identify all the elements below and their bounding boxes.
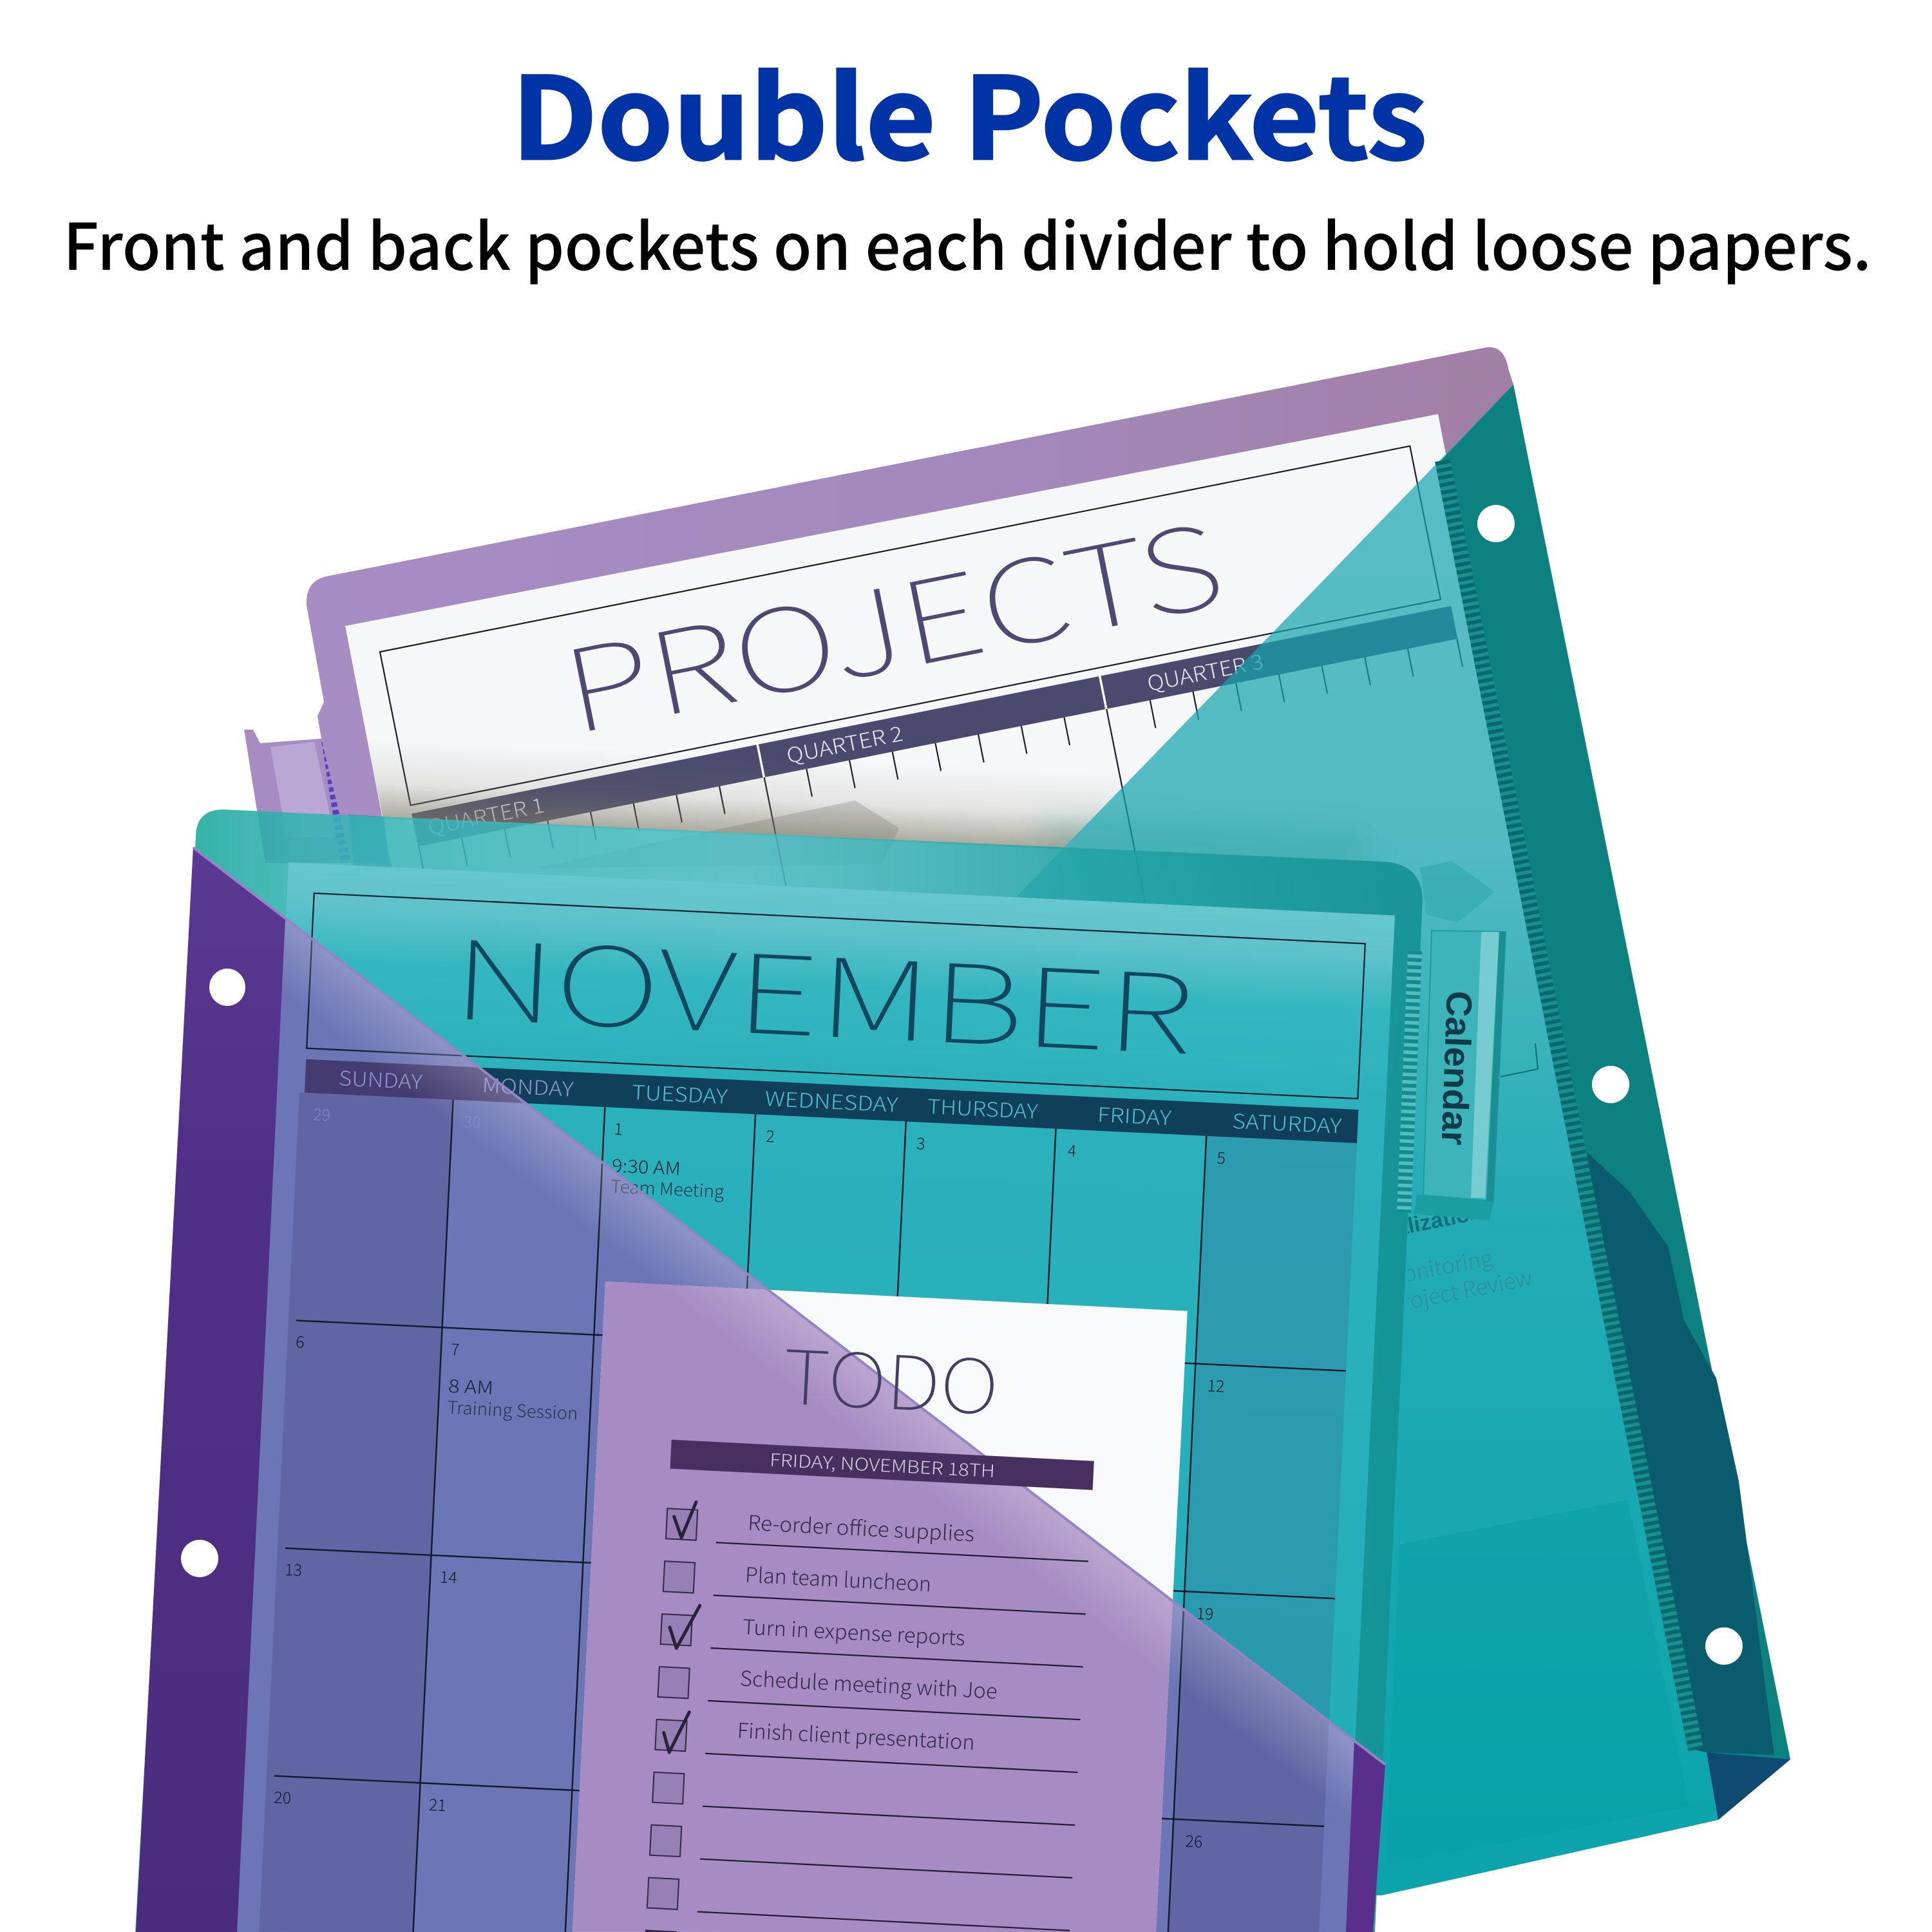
quarter timeline bar: QUARTER 2 bbox=[784, 717, 905, 770]
november sheet: weekday header bar bbox=[305, 1059, 1358, 1143]
shadow cast by front divider bbox=[371, 754, 1121, 849]
november sheet: paper bbox=[237, 862, 1395, 1932]
quarter timeline bar bbox=[411, 603, 1458, 848]
checklist boxes bbox=[646, 1508, 697, 1932]
front divider: right perforated weld line bbox=[1404, 951, 1415, 1213]
teal pocket: see-through text: Project Review bbox=[1387, 1260, 1535, 1319]
checklist items bbox=[737, 1507, 1006, 1757]
quarter timeline bar: QUARTER 1 bbox=[425, 789, 547, 841]
date numbers: 7 bbox=[450, 1337, 460, 1361]
checklist items: Finish client presentation bbox=[737, 1714, 976, 1756]
date numbers: 1 bbox=[614, 1117, 623, 1140]
weekday labels bbox=[338, 1062, 1343, 1139]
date numbers: 21 bbox=[428, 1792, 447, 1816]
checklist items: Plan team luncheon bbox=[744, 1559, 932, 1598]
checkmarks bbox=[662, 1501, 705, 1754]
teal pocket: darker lower strip bbox=[1586, 1153, 1774, 1755]
event: team meeting: Team Meeting bbox=[611, 1173, 725, 1203]
teal pocket: see-through text: Monitoring bbox=[1383, 1240, 1495, 1292]
date numbers: 19 bbox=[1196, 1601, 1214, 1625]
date numbers: 6 bbox=[295, 1329, 305, 1353]
title: Double Pockets bbox=[511, 28, 1427, 192]
front divider: teal sheet bbox=[135, 810, 1423, 1932]
front pocket: left dark strip bbox=[136, 848, 285, 1932]
event: training session: Training Session bbox=[447, 1394, 578, 1425]
checklist items: Schedule meeting with Joe bbox=[739, 1662, 998, 1705]
event: training session: 8 AM bbox=[448, 1372, 494, 1400]
calendar grid bbox=[267, 1093, 1357, 1932]
date numbers: 30 bbox=[463, 1110, 482, 1133]
weekday labels: FRIDAY bbox=[1097, 1099, 1173, 1131]
punched hole: front lower bbox=[181, 1540, 218, 1577]
heading: todo: TODO bbox=[781, 1317, 1001, 1436]
calendar index tab bbox=[1423, 931, 1506, 1201]
weekday labels: MONDAY bbox=[482, 1069, 574, 1103]
heading: november: NOVEMBER bbox=[450, 893, 1197, 1086]
weekday labels: SUNDAY bbox=[338, 1062, 424, 1095]
checklist items: Re-order office supplies bbox=[747, 1507, 975, 1548]
event: team meeting bbox=[611, 1152, 726, 1203]
timeline ticks bbox=[419, 639, 1510, 1113]
weekday labels: SATURDAY bbox=[1231, 1105, 1343, 1139]
checklist items: Turn in expense reports bbox=[742, 1611, 966, 1652]
date bar: FRIDAY, NOVEMBER 18TH bbox=[769, 1446, 996, 1482]
back divider: teal front pocket bbox=[966, 384, 1790, 1895]
event: training session bbox=[447, 1372, 580, 1425]
front pocket: right dark strip bbox=[1346, 1740, 1385, 1932]
projects sheet: paper bbox=[345, 414, 1597, 1448]
punched hole: back top bbox=[1477, 505, 1515, 542]
date numbers: 12 bbox=[1207, 1373, 1225, 1397]
teal pocket: see-through heading: Visualization bbox=[1349, 1200, 1484, 1249]
weekday labels: THURSDAY bbox=[927, 1090, 1039, 1124]
teal pocket: see-through text bbox=[1408, 1253, 1530, 1311]
punched hole: front upper bbox=[209, 969, 245, 1006]
november sheet: saturday shading bbox=[1168, 1136, 1357, 1932]
pocket: soft shadow from front divider bbox=[1043, 824, 1365, 866]
punched hole: back bottom bbox=[1705, 1627, 1743, 1665]
date numbers bbox=[274, 1102, 1236, 1853]
date bar bbox=[670, 1440, 1094, 1490]
projects sheet bbox=[377, 431, 1511, 1113]
tab shadow base bbox=[1414, 1195, 1494, 1220]
back divider: left pocket sliver with perforations bbox=[244, 730, 354, 863]
date numbers: 29 bbox=[312, 1102, 331, 1126]
teal pocket: lower inner panel bbox=[1386, 1500, 1689, 1865]
todo sheet: paper bbox=[573, 1282, 1188, 1932]
back divider: purple sheet bbox=[307, 347, 1513, 902]
arrow tab seen behind front divider bbox=[1420, 861, 1495, 923]
date numbers: 4 bbox=[1067, 1139, 1077, 1162]
date numbers: 14 bbox=[439, 1565, 458, 1589]
date numbers: 20 bbox=[274, 1785, 292, 1809]
date numbers: 13 bbox=[284, 1557, 303, 1581]
todo sheet: purple film portion bbox=[573, 1282, 1188, 1932]
date numbers: 5 bbox=[1217, 1146, 1226, 1169]
front pocket: sunday and saturday shading bbox=[259, 1059, 1358, 1932]
heading: projects: PROJECTS bbox=[549, 474, 1235, 766]
title frame bbox=[307, 893, 1365, 1099]
checklist rules bbox=[697, 1542, 1088, 1931]
timeline arrow seen through pocket bbox=[535, 800, 899, 868]
date numbers: 2 bbox=[766, 1124, 775, 1148]
weekday labels: WEDNESDAY bbox=[764, 1083, 899, 1118]
event: team meeting: 9:30 AM bbox=[611, 1152, 681, 1181]
date numbers: 26 bbox=[1185, 1829, 1203, 1853]
quarter timeline bar: QUARTER 3 bbox=[1144, 645, 1265, 697]
front pocket: diagonal edge bbox=[193, 848, 1385, 1765]
date numbers: 3 bbox=[916, 1131, 925, 1155]
teal pocket: perforated weld line bbox=[1443, 460, 1696, 1750]
front pocket: light glare along diagonal bbox=[135, 848, 1385, 1842]
todo sheet: contents bbox=[646, 1312, 1101, 1932]
subtitle: Front and back pockets on each divider to hold loose papers. bbox=[63, 195, 1871, 289]
left coil seen through front divider bbox=[348, 815, 388, 864]
weekday labels: TUESDAY bbox=[631, 1076, 729, 1110]
tab label: Calendar bbox=[1434, 990, 1480, 1146]
front pocket: purple film over calendar bbox=[136, 848, 1385, 1932]
title frame bbox=[380, 446, 1441, 806]
teal pocket: folded corner bbox=[1707, 1752, 1790, 1820]
binder page remnant corner bbox=[1501, 1043, 1538, 1077]
teal pocket: binding strip bbox=[1441, 384, 1790, 1759]
november sheet: calendar contents bbox=[265, 886, 1367, 1932]
punched hole: back middle bbox=[1592, 1066, 1629, 1103]
